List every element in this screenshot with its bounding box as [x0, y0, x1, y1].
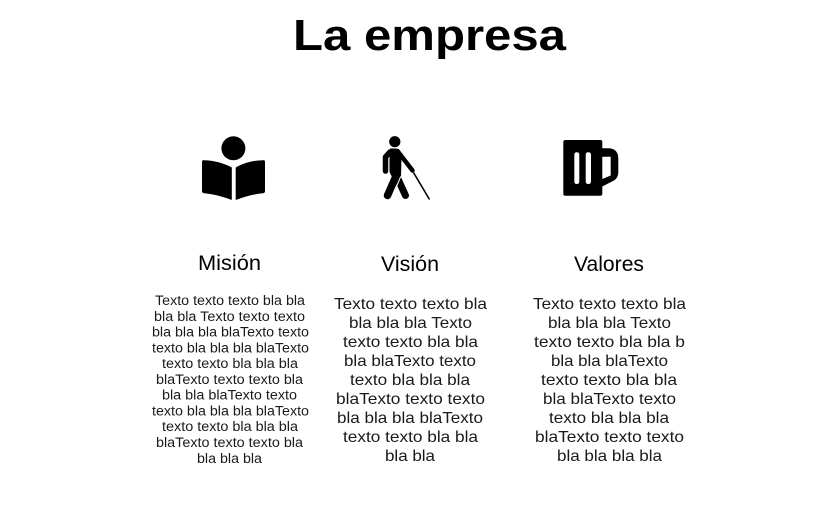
- text block: Misión: Texto texto texto bla bla: [155, 293, 306, 308]
- heading: Valores: Valores: [574, 253, 644, 276]
- text block: Visión: bla bla: [385, 448, 435, 465]
- text block: Misión: texto texto bla bla bla: [162, 356, 299, 371]
- icon: reader with open book: [202, 136, 265, 200]
- text block: Visión: blaTexto texto texto: [336, 391, 485, 408]
- text block: Visión: bla bla bla blaTexto: [337, 410, 483, 427]
- text block: Visión: [334, 296, 487, 465]
- text block: Visión: bla blaTexto texto: [344, 353, 476, 370]
- text block: Visión: texto bla bla bla: [350, 372, 470, 389]
- text block: Misión: texto bla bla bla blaTexto: [152, 404, 309, 418]
- text block: Misión: bla bla blaTexto texto: [162, 388, 297, 402]
- text block: Valores: bla blaTexto texto: [543, 391, 676, 408]
- heading: Misión: Misión: [198, 252, 261, 275]
- text block: Misión: blaTexto texto texto bla: [156, 435, 304, 450]
- text block: Visión: texto texto bla bla: [343, 429, 478, 446]
- text block: Valores: Texto texto texto bla: [533, 296, 686, 313]
- text block: Valores: bla bla blaTexto: [551, 353, 668, 370]
- text block: Misión: texto bla bla bla blaTexto: [152, 340, 309, 356]
- text block: Visión: Texto texto texto bla: [334, 296, 487, 313]
- text block: Valores: texto texto bla bla: [541, 372, 677, 389]
- text block: Valores: bla bla bla bla: [557, 448, 662, 465]
- icon: beer mug: [563, 140, 618, 196]
- title: La empresa: [293, 11, 567, 60]
- icon: person walking with cane: [386, 136, 430, 200]
- heading: Visión: Visión: [381, 253, 439, 276]
- text block: Valores: blaTexto texto texto: [535, 429, 684, 446]
- text block: Visión: bla bla bla Texto: [349, 315, 472, 332]
- text block: Valores: texto texto bla bla b: [534, 334, 685, 351]
- text block: Visión: texto texto bla bla: [343, 334, 478, 351]
- text block: Valores: bla bla bla Texto: [548, 315, 671, 332]
- text block: Misión: [152, 293, 309, 466]
- text block: Misión: texto texto bla bla bla: [162, 419, 299, 434]
- text block: Valores: [533, 296, 686, 465]
- text block: Misión: bla bla Texto texto texto: [154, 309, 305, 324]
- text block: Misión: bla bla bla blaTexto texto: [152, 324, 309, 340]
- text block: Misión: bla bla bla: [197, 451, 263, 466]
- text block: Valores: texto bla bla bla: [549, 410, 669, 427]
- text block: Misión: blaTexto texto texto bla: [156, 372, 304, 387]
